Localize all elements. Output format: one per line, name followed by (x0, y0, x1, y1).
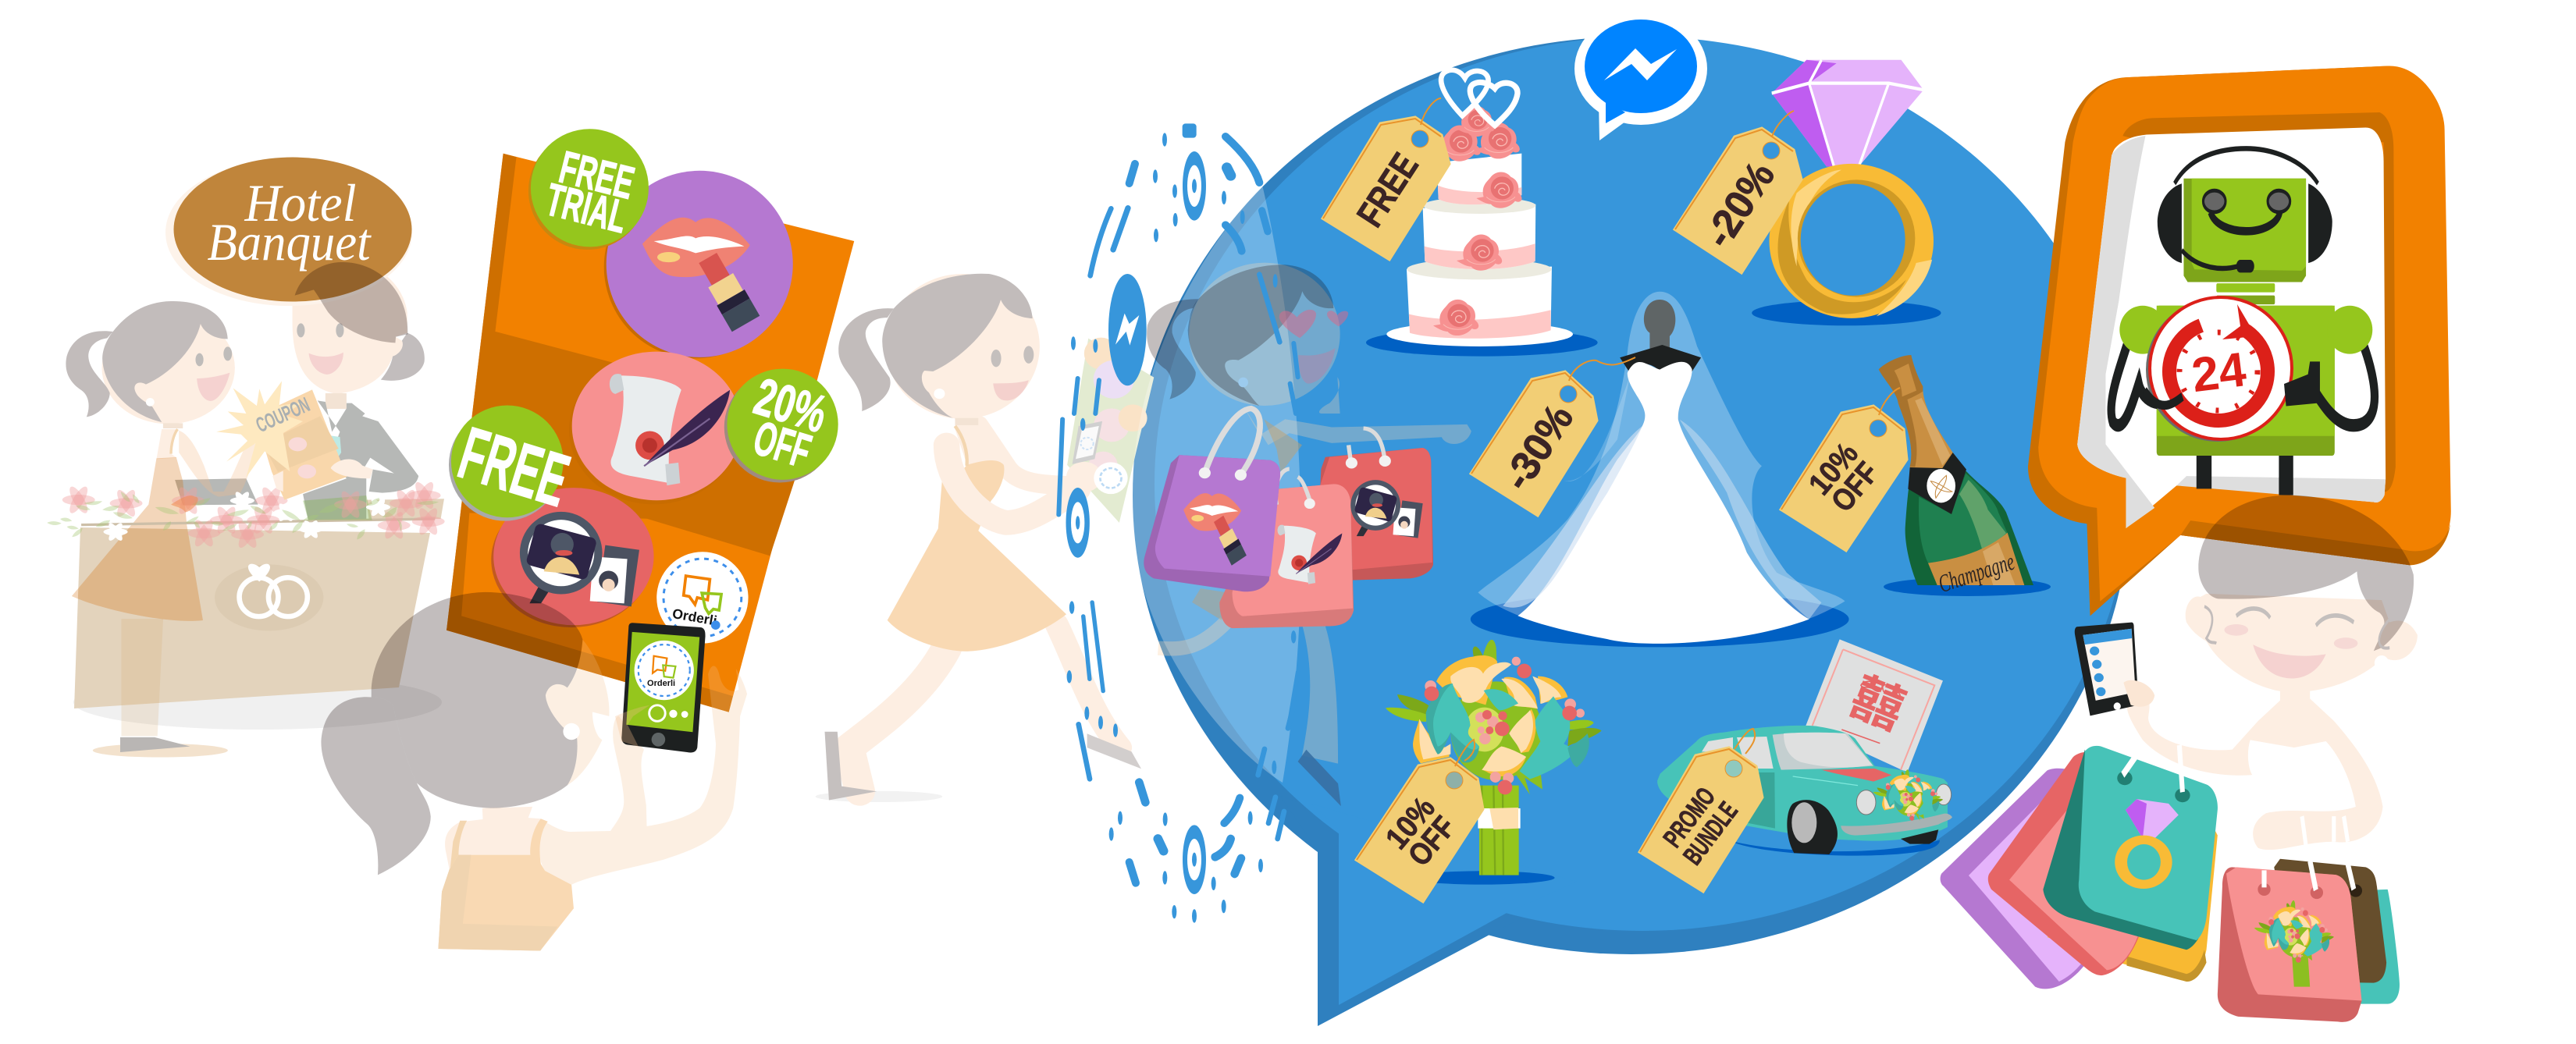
panel: hotel banquet reception scene (47, 158, 445, 758)
badge: free: FREE (450, 412, 578, 523)
tag: promo bundle: BUNDLE (1678, 797, 1744, 871)
shopping bags held by ghost shopper (1144, 408, 1433, 628)
bride face and body (2186, 594, 2418, 692)
bags at right (2310, 890, 2400, 1004)
lightened QR lens over bubble (1132, 185, 1301, 783)
item: wedding gown (1471, 292, 1849, 647)
panel: orange promotion poster (447, 129, 854, 712)
hair (372, 592, 582, 808)
hotel banquet sign: Hotel (244, 173, 356, 233)
desk flower garland (47, 480, 445, 550)
torso skin (445, 807, 541, 869)
dress (438, 819, 574, 951)
double happiness character: 囍 (1841, 655, 1917, 744)
24 hour clock badge (2146, 297, 2292, 442)
desk top shelf (366, 499, 444, 520)
tag: 10 percent off bouquet (1356, 740, 1483, 902)
thumb over phone (615, 705, 649, 747)
bag artwork: scroll (1278, 525, 1342, 584)
white window (2077, 128, 2386, 528)
badge: free trial: TRIAL (541, 174, 632, 243)
champagne label: Champagne (1934, 547, 2018, 598)
bag: red photo (1319, 428, 1433, 581)
tag: 10 percent off champagne: 10% (1802, 436, 1865, 502)
tag: minus 20 percent: -20% (1695, 154, 1784, 256)
coupon (216, 381, 373, 500)
ponytail (321, 697, 431, 875)
offer: lips (604, 171, 793, 358)
tag: minus 30 percent: -30% (1494, 396, 1582, 499)
person: happy bride with phone and bags (1941, 495, 2418, 1022)
bag: purple lips (1144, 408, 1280, 591)
badge: free trial (528, 129, 649, 250)
item: diamond ring (1752, 60, 1941, 325)
QR code sticker (656, 552, 749, 644)
tag: minus 30 percent (1471, 357, 1635, 516)
badge: 20% off: OFF (747, 411, 817, 479)
item: bouquet (1386, 640, 1602, 885)
mini diamond ring (2126, 799, 2179, 839)
tag: 10 percent off bouquet: 10% (1379, 790, 1442, 856)
bag artwork: lips (1183, 493, 1247, 566)
tag: promo bundle: PROMO (1658, 782, 1721, 853)
tag: 10 percent off champagne: OFF (1825, 456, 1885, 518)
tag: 10 percent off champagne (1781, 388, 1907, 551)
item: champagne bottle (1879, 355, 2051, 598)
bubble face (2038, 66, 2451, 602)
receptionist woman (293, 263, 425, 520)
invitation card (1806, 639, 1943, 772)
customer woman (66, 301, 258, 621)
phone in hand (2075, 623, 2139, 716)
flyer in hand (1067, 338, 1154, 523)
icon: messenger logo (1574, 12, 1707, 140)
customer legs and shoes (93, 619, 228, 758)
offer: scroll (569, 352, 742, 504)
phone with QR: Orderli (647, 679, 675, 688)
poster darker bands (447, 154, 816, 712)
tag: promo bundle (1639, 729, 1763, 892)
tag: free (1322, 98, 1450, 260)
person: running woman with flyer (816, 274, 1154, 802)
bubble face (1155, 37, 2130, 1005)
item: wedding car with invitation card (1657, 639, 1952, 856)
badge: 20% off: 20% (748, 368, 834, 444)
QR messenger code dashes (1059, 123, 1298, 923)
desk (74, 527, 430, 708)
fanned shopping bags (1941, 745, 2400, 1022)
ring emblem on desk (215, 564, 323, 630)
tag: minus 20 percent (1674, 111, 1802, 273)
QR code sticker: Orderli (671, 605, 718, 629)
laptop (175, 478, 258, 505)
offer: photo (491, 488, 654, 627)
bubble shade (2028, 66, 2410, 616)
badge: free trial: FREE (554, 142, 639, 209)
mini bouquet on bonnet (1873, 769, 1943, 821)
receptionist hair (295, 262, 407, 343)
raised arms (539, 666, 747, 885)
heart eyes (1279, 310, 1316, 338)
coupon label: COUPON (252, 392, 313, 437)
tag: 10 percent off bouquet: OFF (1402, 810, 1462, 872)
QR eye top (1183, 151, 1206, 221)
QR messenger logo (1108, 274, 1147, 385)
panel: blue chat bubble (1133, 37, 2130, 1026)
item: wedding cake (1366, 70, 1598, 357)
small phone (1073, 421, 1102, 464)
mini bouquet on bag (2254, 900, 2334, 963)
tag: free: FREE (1350, 146, 1427, 234)
person: woman photographing the poster (321, 592, 747, 951)
bag: pink scroll (1219, 469, 1354, 628)
hotel banquet sign: Banquet (208, 212, 372, 272)
hotel banquet sign (165, 158, 412, 306)
badge: free (449, 406, 578, 523)
QR eye bottom (1183, 825, 1206, 894)
poster sheet (447, 154, 854, 712)
phone with QR (621, 623, 706, 752)
badge: 20% off (724, 368, 838, 483)
24 hour clock badge: 24 (2189, 343, 2249, 403)
panel: orange support speech bubble with robot (2028, 66, 2451, 616)
floor shadow (73, 675, 442, 730)
bubble bottom edge shade (2180, 520, 2450, 565)
person: ghosted shopper inside the bubble (1147, 263, 1471, 806)
bubble shade (1133, 37, 2130, 1026)
face (546, 640, 610, 785)
bag artwork: photo (1350, 480, 1423, 538)
inner frame shade (2122, 112, 2396, 492)
robot (2112, 148, 2375, 495)
